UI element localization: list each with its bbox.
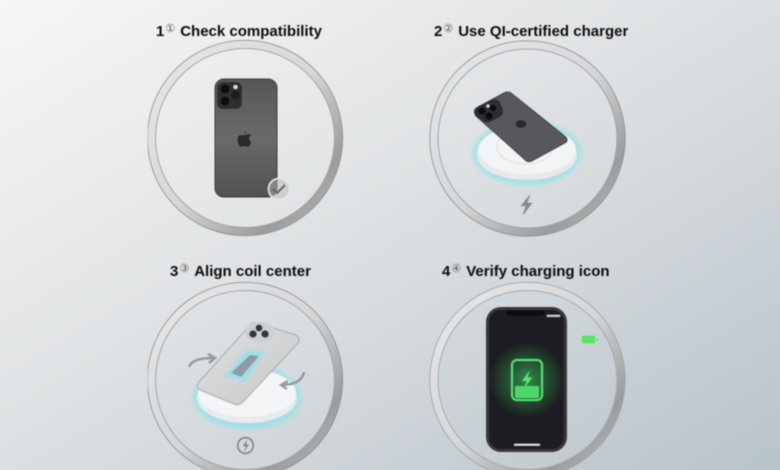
heading: step 1: ① [165,23,175,35]
heading: step 1: Check compatibility [180,23,323,40]
heading: step 4: Verify charging icon [466,263,610,280]
icon: lightning bolt [521,195,532,215]
heading: step 4: 4 [442,263,450,280]
icon: check badge [268,178,290,200]
heading: step 2: 2 [434,23,442,40]
arrow: rotate right [281,372,304,389]
ring: step 3 [148,282,342,470]
icon: phone back [215,79,277,197]
icon: phone on charger [474,92,567,162]
heading: step 3: 3 [170,263,178,280]
panel: step 3 align coil center [148,263,342,470]
icon: green battery [581,335,598,344]
icon: charging circle [238,438,253,453]
icon: silver phone with coil [197,322,299,405]
heading: step 2: Use QI-certified charger [458,23,628,40]
ring: step 4 [430,282,625,470]
ring: step 1 [148,40,342,236]
panel: step 1 check compatibility [148,23,342,236]
heading: step 4: ④ [451,263,461,275]
icon: charger pad [193,365,301,429]
heading: step 3: Align coil center [194,263,311,280]
panel: step 2 use Qi-certified charger [430,23,628,236]
heading: step 1: 1 [156,23,164,40]
heading: step 3: ③ [179,263,189,275]
infographic content [148,23,628,470]
ring: step 2 [430,41,625,236]
icon: phone with charging screen [486,307,567,452]
arrow: rotate left [189,354,215,367]
panel: step 4 verify charging icon [430,263,625,470]
icon: charger pad [473,121,581,185]
heading: step 2: ② [443,23,453,35]
